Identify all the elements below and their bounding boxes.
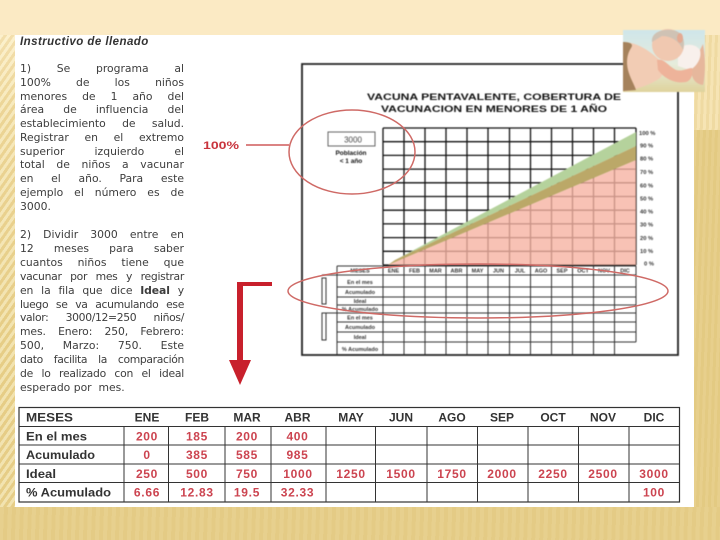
table values: 750 xyxy=(236,467,258,481)
text block: step 1: 3000. xyxy=(20,200,51,213)
frame xyxy=(302,64,678,355)
fill-in table: En el mes xyxy=(347,316,373,322)
percent axis: 50 % xyxy=(640,196,653,202)
text block: step 2: luego se va acumulando ese xyxy=(20,298,184,311)
table values: 385 xyxy=(186,448,208,462)
percent axis: 40 % xyxy=(640,210,653,216)
table header: OCT xyxy=(540,410,566,424)
chart title xyxy=(367,91,621,114)
table values: 500 xyxy=(186,467,208,481)
table values: 3000 xyxy=(639,467,669,481)
percent axis: 10 % xyxy=(640,249,653,255)
table values: 12.83 xyxy=(180,486,214,500)
fill-in table: JUL xyxy=(515,268,526,274)
fill-in table: DIC xyxy=(620,268,630,274)
table values: 19.5 xyxy=(234,486,260,500)
table header: ENE xyxy=(135,410,159,424)
text block: step 1: 100% de los niños xyxy=(20,76,184,89)
table header: NOV xyxy=(590,410,616,424)
row labels: En el mes xyxy=(26,430,87,444)
table values: 6.66 xyxy=(134,486,160,500)
percent axis: 100 % xyxy=(639,131,655,137)
table values: 185 xyxy=(186,430,208,444)
percent axis: 30 % xyxy=(640,222,653,228)
table values: 1750 xyxy=(437,467,467,481)
fill-in table: JUN xyxy=(493,268,504,274)
percent axis: 70 % xyxy=(640,170,653,176)
fill-in table: AGO xyxy=(535,268,548,274)
chart: vaccination coverage form xyxy=(302,64,678,355)
fill-in table: OCT xyxy=(577,268,589,274)
fill-in table: % Acumulado xyxy=(342,347,379,353)
percent axis xyxy=(639,131,655,268)
text block: step 2: 2) Dividir 3000 entre en xyxy=(20,228,184,241)
table header: MESES xyxy=(26,410,73,424)
callout: 100% label: 100% xyxy=(203,140,239,152)
callout: 100% label xyxy=(203,140,289,152)
table values: 1500 xyxy=(386,467,416,481)
fill-in table: FEB xyxy=(409,268,420,274)
ellipse: table highlight xyxy=(288,264,668,318)
chart title: VACUNACION EN MENORES DE 1 AÑO xyxy=(381,103,607,114)
text block: step 1: superior izquierdo el xyxy=(20,145,184,158)
table values: 585 xyxy=(236,448,258,462)
line grid xyxy=(383,128,636,265)
table values: 985 xyxy=(286,448,309,462)
fill-in table: MESES xyxy=(350,268,370,274)
text block: step 1: 1) Se programa al xyxy=(20,62,184,75)
photo: mother and baby xyxy=(623,29,705,92)
table header: MAY xyxy=(338,410,364,424)
row labels: % Acumulado xyxy=(26,486,111,500)
fill-in table: SEP xyxy=(556,268,568,274)
text block: step 2: en la fila que dice Ideal y xyxy=(20,284,184,297)
fill-in table: % Acumulado xyxy=(342,307,379,313)
text block: step 1: ejemplo el número es de xyxy=(20,186,184,199)
text block: step 1: total de niños a vacunar xyxy=(20,158,184,171)
text block: step 1: menores de 1 año del xyxy=(20,90,184,103)
text block: step 1: en el año. Para este xyxy=(20,172,184,185)
table values: 0 xyxy=(143,448,151,462)
table values xyxy=(134,430,669,500)
text block: step 1 xyxy=(20,62,184,213)
heading: instructivo: Instructivo de llenado xyxy=(20,36,149,48)
percent axis: 80 % xyxy=(640,156,653,162)
olive band xyxy=(388,146,636,265)
fill-in table: ENE xyxy=(388,268,399,274)
fill-in table: MAR xyxy=(429,268,442,274)
fill-in table: Ideal xyxy=(354,299,367,305)
table values: 400 xyxy=(286,430,309,444)
population box xyxy=(328,132,375,165)
percent axis: 90 % xyxy=(640,144,653,150)
text block: step 1: establecimiento de salud. xyxy=(20,117,184,130)
fill-in table: ABR xyxy=(451,268,462,274)
table header: JUN xyxy=(389,410,413,424)
text block: step 2: valor: 3000/12=250 niños/ xyxy=(20,311,184,324)
text block: step 2: vacunar por mes y registrar xyxy=(20,270,184,283)
fill-in table: NOV xyxy=(598,268,610,274)
pink area xyxy=(388,160,636,265)
table header xyxy=(26,410,665,424)
row labels xyxy=(26,430,111,500)
text block: step 2: cuantos niños tiene que xyxy=(20,256,184,269)
fill-in table: MAY xyxy=(472,268,484,274)
table header: ABR xyxy=(284,410,311,424)
text block: step 2: dato facilita la comparación xyxy=(20,353,184,366)
table header: MAR xyxy=(233,410,261,424)
percent axis: 0 % xyxy=(644,262,654,268)
table: monthly results xyxy=(19,408,680,502)
table values: 32.33 xyxy=(281,486,314,500)
fill-in table xyxy=(322,266,636,355)
chart title: VACUNA PENTAVALENTE, COBERTURA DE xyxy=(367,91,621,102)
fill-in table: Ideal xyxy=(354,335,367,341)
fill-in table: Acumulado xyxy=(345,290,376,296)
text block: step 2: de lo realizado con el ideal xyxy=(20,367,184,380)
table values: 100 xyxy=(643,486,665,500)
population box: Población xyxy=(335,150,367,157)
table header: DIC xyxy=(644,410,665,424)
table values: 200 xyxy=(236,430,258,444)
table header: FEB xyxy=(185,410,209,424)
green band xyxy=(395,132,636,260)
table values: 250 xyxy=(136,467,158,481)
population box: 3000 xyxy=(344,136,362,144)
table values: 2500 xyxy=(588,467,618,481)
text block: step 2: 500, Marzo: 750. Este xyxy=(20,339,184,352)
table values: 200 xyxy=(136,430,158,444)
text block: step 1: Registrar en el extremo xyxy=(20,131,184,144)
text block: step 2 xyxy=(20,228,184,394)
population box: < 1 año xyxy=(340,158,362,165)
table values: 2250 xyxy=(538,467,568,481)
arrow: red down xyxy=(229,282,272,385)
table header: SEP xyxy=(490,410,514,424)
ellipse: population highlight xyxy=(289,110,415,194)
table values: 2000 xyxy=(487,467,517,481)
text block: step 2: esperado por mes. xyxy=(20,381,125,394)
text block: step 1: área de influencia del xyxy=(20,103,184,116)
fill-in table: Acumulado xyxy=(345,325,376,331)
row labels: Ideal xyxy=(26,467,56,481)
percent axis: 20 % xyxy=(640,236,653,242)
text block: step 2: 12 meses para saber xyxy=(20,242,184,255)
row labels: Acumulado xyxy=(26,448,95,462)
table values: 1250 xyxy=(336,467,366,481)
percent axis: 60 % xyxy=(640,184,653,190)
text block: step 2: mes. Enero: 250, Febrero: xyxy=(20,325,184,338)
table header: AGO xyxy=(438,410,466,424)
fill-in table: En el mes xyxy=(347,280,373,286)
table values: 1000 xyxy=(283,467,313,481)
